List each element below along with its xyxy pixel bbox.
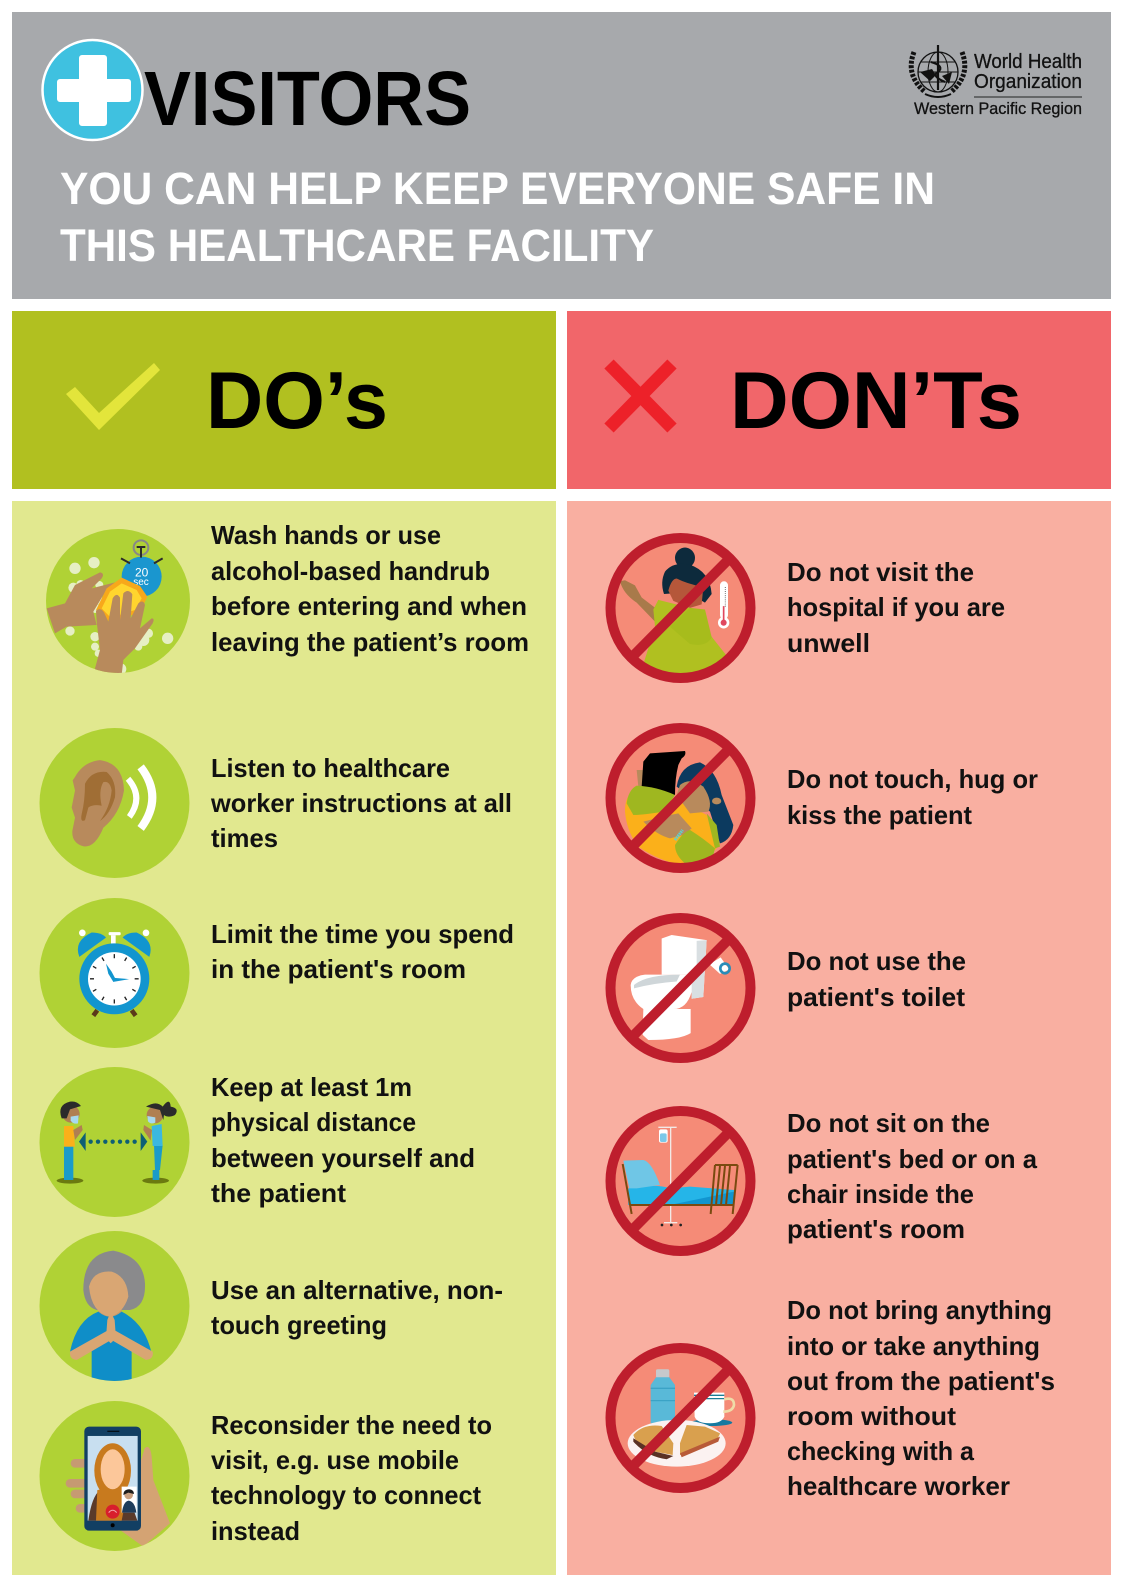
text: reconsider visit: instead — [211, 1516, 300, 1546]
logo: World Health Organization — [911, 45, 1082, 118]
text: keep distance: the patient — [211, 1178, 346, 1208]
text: unwell — [787, 557, 1005, 658]
text: unwell: unwell — [787, 628, 870, 658]
text: wash hands — [211, 520, 529, 657]
subtitle: YOU CAN HELP KEEP EVERYONE SAFE IN — [60, 163, 935, 214]
icon: cross mark — [609, 364, 672, 428]
text: reconsider visit — [211, 1410, 492, 1546]
text: greeting — [211, 1275, 503, 1340]
text: limit time: in the patient's room — [211, 954, 466, 984]
text: listen: worker instructions at all — [210, 788, 512, 818]
panel: don'ts list — [567, 501, 1111, 1575]
text: keep distance: Keep at least 1m — [211, 1072, 412, 1102]
panel: don'ts header — [567, 311, 1111, 489]
text: greeting: Use an alternative, non- — [211, 1275, 503, 1305]
icon: no hugging — [610, 728, 750, 868]
panel: do's list — [12, 501, 556, 1575]
text: no bringing items — [787, 1295, 1055, 1501]
logo: World Health Organization: World Health — [974, 51, 1082, 73]
text: wash hands: alcohol-based handrub — [211, 556, 490, 586]
text: no bringing items: out from the patient's — [787, 1366, 1055, 1396]
heading: don'ts: DON’Ts — [730, 356, 1022, 446]
icon: non-touch greeting — [40, 1231, 190, 1383]
icon: ear — [40, 728, 190, 878]
text: reconsider visit: technology to connect — [211, 1480, 481, 1510]
text: keep distance: physical distance — [211, 1107, 416, 1137]
text: no bringing items: room without — [787, 1401, 956, 1431]
text: unwell: Do not visit the — [787, 557, 974, 587]
text: limit time: Limit the time you spend — [211, 919, 514, 949]
text: greeting: touch greeting — [211, 1310, 387, 1340]
text: reconsider visit: Reconsider the need to — [211, 1410, 492, 1440]
text: keep distance — [211, 1072, 475, 1208]
text: limit time — [211, 919, 514, 984]
icon: washing hands — [46, 529, 190, 675]
icon: physical distance — [40, 1067, 190, 1217]
subtitle — [60, 163, 935, 271]
text: no bringing items: into or take anything — [787, 1331, 1040, 1361]
text: keep distance: between yourself and — [211, 1143, 475, 1173]
heading: do's: DO’s — [206, 356, 388, 446]
panel: do's header — [12, 311, 556, 489]
text: no sitting: patient's room — [787, 1214, 965, 1244]
text: wash hands: leaving the patient’s room — [211, 627, 529, 657]
logo: World Health Organization: Western Pacific Region — [914, 99, 1082, 118]
text: wash hands: before entering and when — [211, 591, 527, 621]
text: no sitting: patient's bed or on a — [787, 1144, 1038, 1174]
logo: World Health Organization: Organization — [974, 71, 1082, 93]
text: no toilet: patient's toilet — [787, 982, 965, 1012]
text: unwell: hospital if you are — [787, 592, 1005, 622]
icon: medical cross — [42, 40, 142, 140]
icon: alarm clock — [40, 898, 190, 1048]
header panel — [12, 12, 1111, 299]
text: no touching: Do not touch, hug or — [787, 764, 1038, 794]
title: VISITORS — [144, 56, 471, 142]
text: no bringing items: healthcare worker — [787, 1471, 1010, 1501]
text: no sitting: Do not sit on the — [787, 1108, 990, 1138]
text: no toilet: Do not use the — [787, 946, 966, 976]
text: no touching: kiss the patient — [787, 800, 972, 830]
text: no bringing items: Do not bring anything — [787, 1295, 1052, 1325]
text: no touching — [787, 764, 1038, 830]
text: no bringing items: checking with a — [787, 1436, 975, 1466]
text: listen: times — [211, 823, 278, 853]
text: wash hands: Wash hands or use — [211, 520, 441, 550]
icon: washing hands: 20 — [135, 566, 149, 580]
icon: no bringing food and drink — [610, 1348, 750, 1488]
text: listen — [210, 753, 512, 853]
text: listen: Listen to healthcare — [211, 753, 450, 783]
icon: no sitting on bed — [610, 1111, 750, 1251]
text: no toilet — [787, 946, 966, 1012]
icon: mobile video call — [40, 1401, 190, 1551]
text: no sitting — [787, 1108, 1038, 1244]
text: no sitting: chair inside the — [787, 1179, 974, 1209]
text: reconsider visit: visit, e.g. use mobile — [211, 1445, 459, 1475]
icon: no toilet use — [610, 918, 750, 1058]
subtitle: THIS HEALTHCARE FACILITY — [60, 220, 654, 271]
icon: check mark — [66, 363, 160, 430]
icon: washing hands: sec — [133, 577, 149, 588]
icon: no visiting when unwell — [610, 538, 750, 678]
